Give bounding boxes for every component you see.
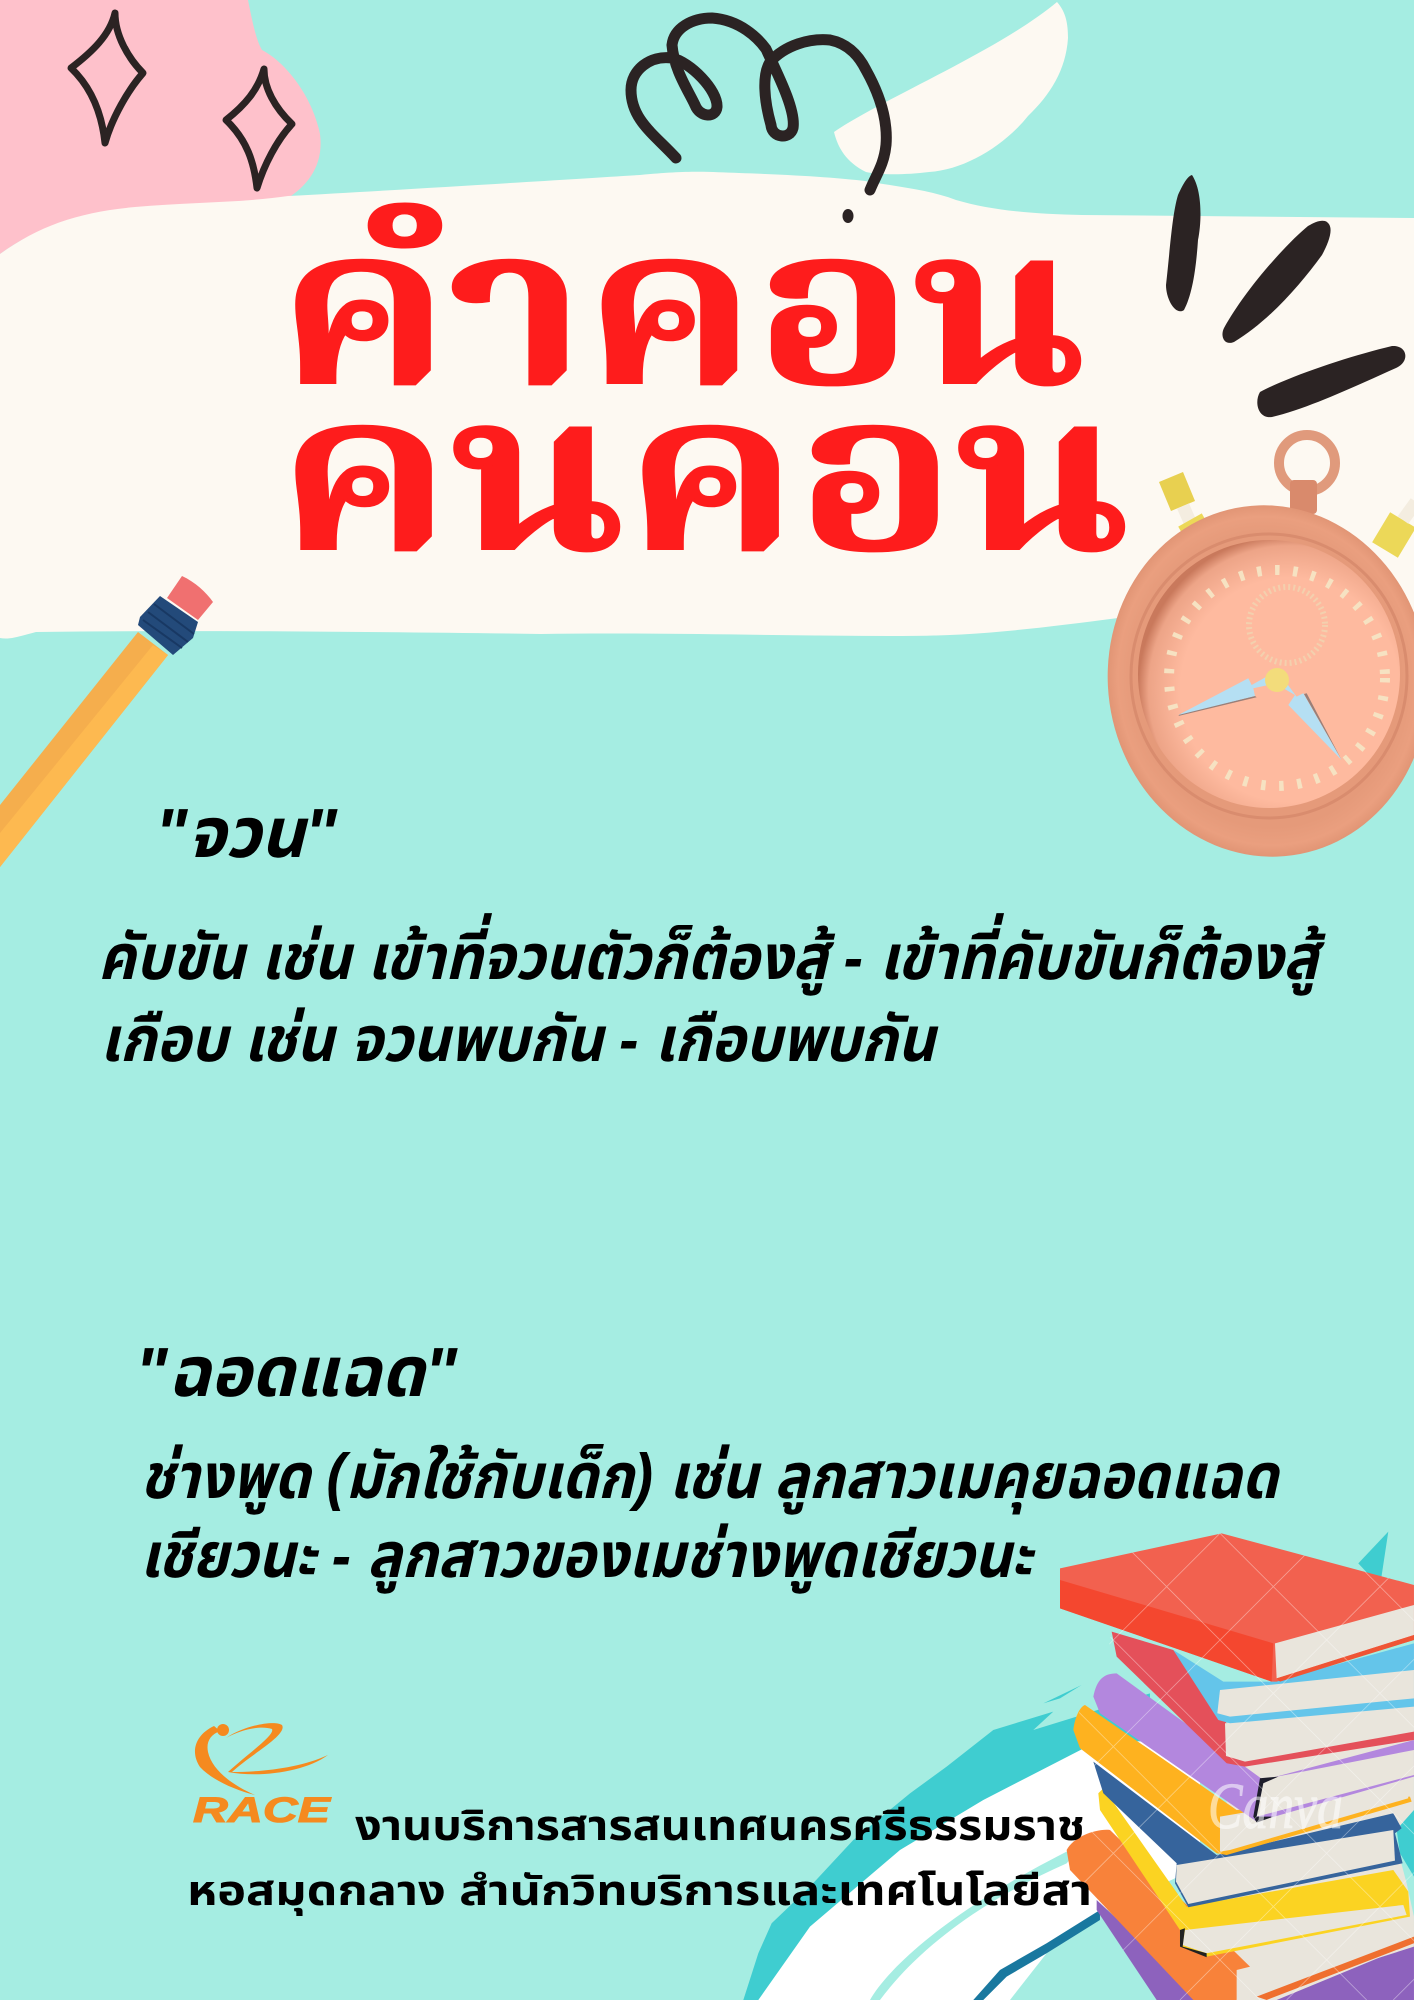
icon: emphasis slash middle [1222,221,1331,343]
icon: squiggle dot [842,209,854,223]
brush tip behind books [1358,1532,1388,1587]
book: dark blue [1093,1762,1403,1907]
book: amber [1073,1705,1412,1855]
icon: pencil [0,576,213,867]
book: light blue [1173,1643,1414,1723]
pink blob [0,0,321,254]
heading: จวน: "จวน" [155,794,338,872]
clock hub [1265,668,1289,692]
brush strokes [743,1685,1200,2000]
book: top red [1060,1533,1414,1682]
icon: sparkle left [71,13,143,143]
text: ฉอดแฉด definitions: เชียวนะ - ลูกสาวของเมช่างพูดเชียวนะ [140,1521,1036,1594]
text: จวน definitions: คับขัน เช่น เข้าที่จวนตัวก็ต้องสู้ - เข้าที่คับขันก็ต้องสู้ [98,913,1326,996]
stack of books [1060,1532,1414,2000]
page filler behind books [1227,1650,1414,2000]
clock case [1085,484,1414,878]
text: ฉอดแฉด definitions [140,1442,1281,1594]
icon: emphasis slash top [1166,175,1200,311]
book: bottom purple [1097,1900,1414,2000]
book: yellow [1098,1788,1410,1957]
logo: RACE: RACE [193,1791,332,1830]
clock left button [1171,477,1208,552]
clock stem [1290,480,1317,514]
text: จวน definitions [98,913,1326,1075]
white leaf shape [834,2,1068,174]
footer text [187,1802,1092,1916]
text: จวน definitions: เกือบ เช่น จวนพบกัน - เกือบพบกัน [100,1005,939,1075]
heading: ฉอดแฉด: "ฉอดแฉด" [135,1333,458,1411]
clock [1085,435,1414,878]
title line 2: คนคอน [278,353,1130,597]
clock ticks [1169,570,1385,786]
footer text: งานบริการสารสนเทศนครศรีธรรมราช [355,1802,1085,1849]
text: ฉอดแฉด definitions: ช่างพูด (มักใช้กับเด็ก) เช่น ลูกสาวเมคุยฉอดแฉด [140,1442,1281,1515]
clock hands [1178,677,1342,760]
book: red [1112,1632,1414,1767]
clock inner dots [1249,587,1325,663]
footer text: หอสมุดกลาง สำนักวิทบริการและเทศโนโลยีสา [187,1867,1092,1916]
icon: sparkle right [226,69,292,188]
title line 1: คำคอน [278,187,1086,431]
title [278,187,1130,597]
book: purple [1093,1673,1414,1822]
logo: RACE [193,1723,332,1830]
clock face [1138,540,1400,808]
cream banner [0,172,1414,639]
icon: emphasis slash bottom [1257,346,1405,417]
watermark: Canva: Canva [1208,1770,1343,1843]
teal gap behind books [1393,1800,1414,1877]
icon: squiggle [631,18,886,190]
clock ring [1279,435,1335,491]
clock right button [1385,502,1414,550]
book: orange [1067,1830,1250,2000]
watermark lattice [1079,1534,1414,2000]
